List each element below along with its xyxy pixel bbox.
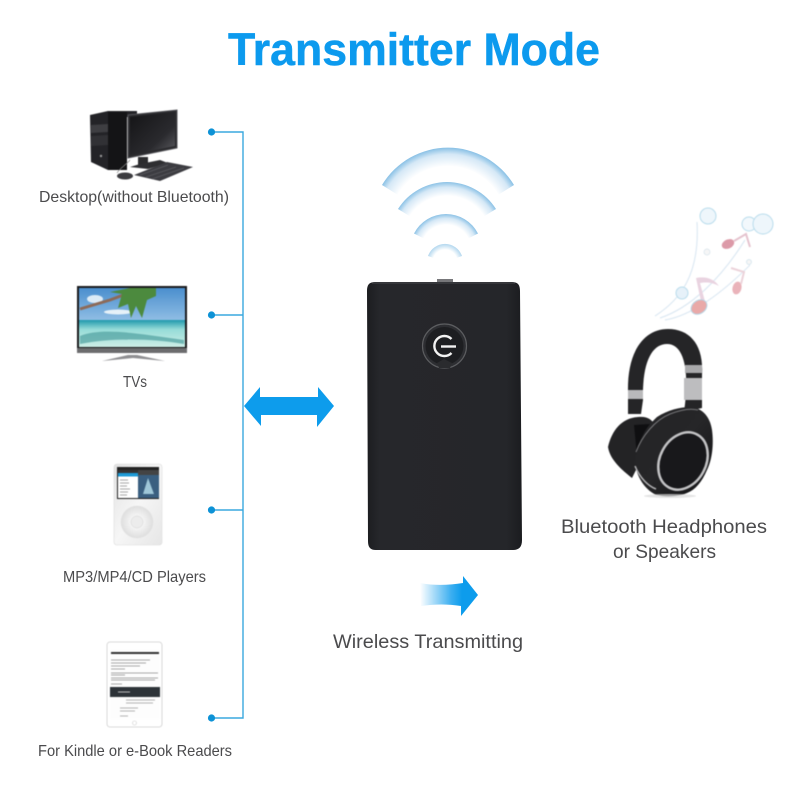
label: TVs: TVs [123,374,147,391]
label: bluetooth headphones or speakers: or Speakers [613,541,716,563]
device: Bluetooth transmitter [367,279,522,550]
label: bluetooth headphones or speakers [561,516,767,563]
icon: TV [77,286,187,361]
label: bluetooth headphones or speakers: Bluetooth Headphones [561,516,767,538]
icon: MP3 player [114,464,162,545]
connector lines [208,128,243,722]
label: wireless transmitting: Wireless Transmitting [333,631,523,653]
wireless transmitting arrow [420,576,478,616]
label: MP3 players: MP3/MP4/CD Players [63,569,206,586]
icon: headphones [608,329,717,498]
icon: desktop computer [90,110,193,181]
icon: e-book reader [107,642,162,727]
power button [422,324,466,368]
icon: music notes and bubbles [655,208,773,320]
label: desktop: Desktop(without Bluetooth) [39,189,229,206]
double arrow [244,387,334,427]
title: Transmitter Mode [228,24,600,75]
label: e-book readers: For Kindle or e-Book Readers [38,743,232,760]
wireless signal waves [382,148,514,258]
